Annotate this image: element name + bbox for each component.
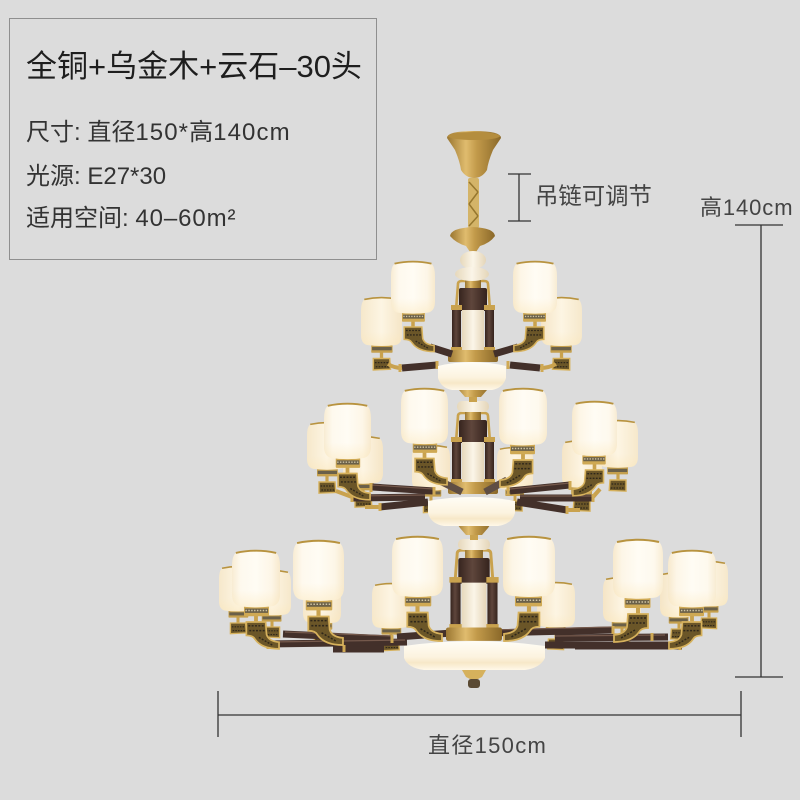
front lamps	[391, 262, 557, 352]
text: light source: 光源: E27*30	[26, 163, 166, 190]
label: height: 高140cm	[700, 195, 793, 220]
back lamps	[219, 562, 728, 651]
height dimension line	[735, 225, 783, 677]
topper of middle column	[455, 384, 491, 412]
centre column	[448, 275, 498, 362]
alabaster disk	[438, 362, 506, 390]
wooden arms	[336, 480, 600, 514]
text: size: 尺寸: 直径150*高140cm	[26, 119, 291, 146]
topper of lower column	[456, 522, 492, 550]
text: applicable space: 适用空间: 40–60m²	[26, 205, 236, 232]
gold dish	[450, 227, 495, 252]
back lamps	[307, 421, 638, 513]
tier 3: lower ring of lamps	[219, 537, 728, 688]
title: 全铜+乌金木+云石–30头	[26, 49, 362, 84]
tier 2: middle ring of lamps	[307, 389, 638, 550]
front lamps	[232, 537, 716, 649]
front lamps	[324, 389, 617, 500]
label: diameter: 直径150cm	[428, 733, 547, 758]
wooden arms	[268, 626, 682, 652]
chain adjustment bracket	[508, 174, 531, 221]
back lamps	[361, 298, 582, 370]
ceiling canopy and chain	[447, 131, 501, 281]
panel: product specifications	[9, 18, 377, 260]
alabaster disk	[428, 497, 515, 526]
bottom finial	[462, 670, 486, 688]
diameter dimension line	[218, 691, 741, 737]
canopy rim	[448, 132, 500, 140]
centre column	[446, 543, 502, 641]
tier 1: upper ring of lamps	[361, 262, 582, 412]
alabaster disk	[404, 641, 545, 670]
chandelier	[219, 131, 728, 688]
wooden arms	[388, 347, 556, 372]
centre column	[448, 407, 498, 494]
label: adjustable chain: 吊链可调节	[535, 183, 652, 209]
chain	[468, 178, 479, 228]
canopy	[447, 131, 501, 178]
stone beads	[455, 251, 489, 281]
